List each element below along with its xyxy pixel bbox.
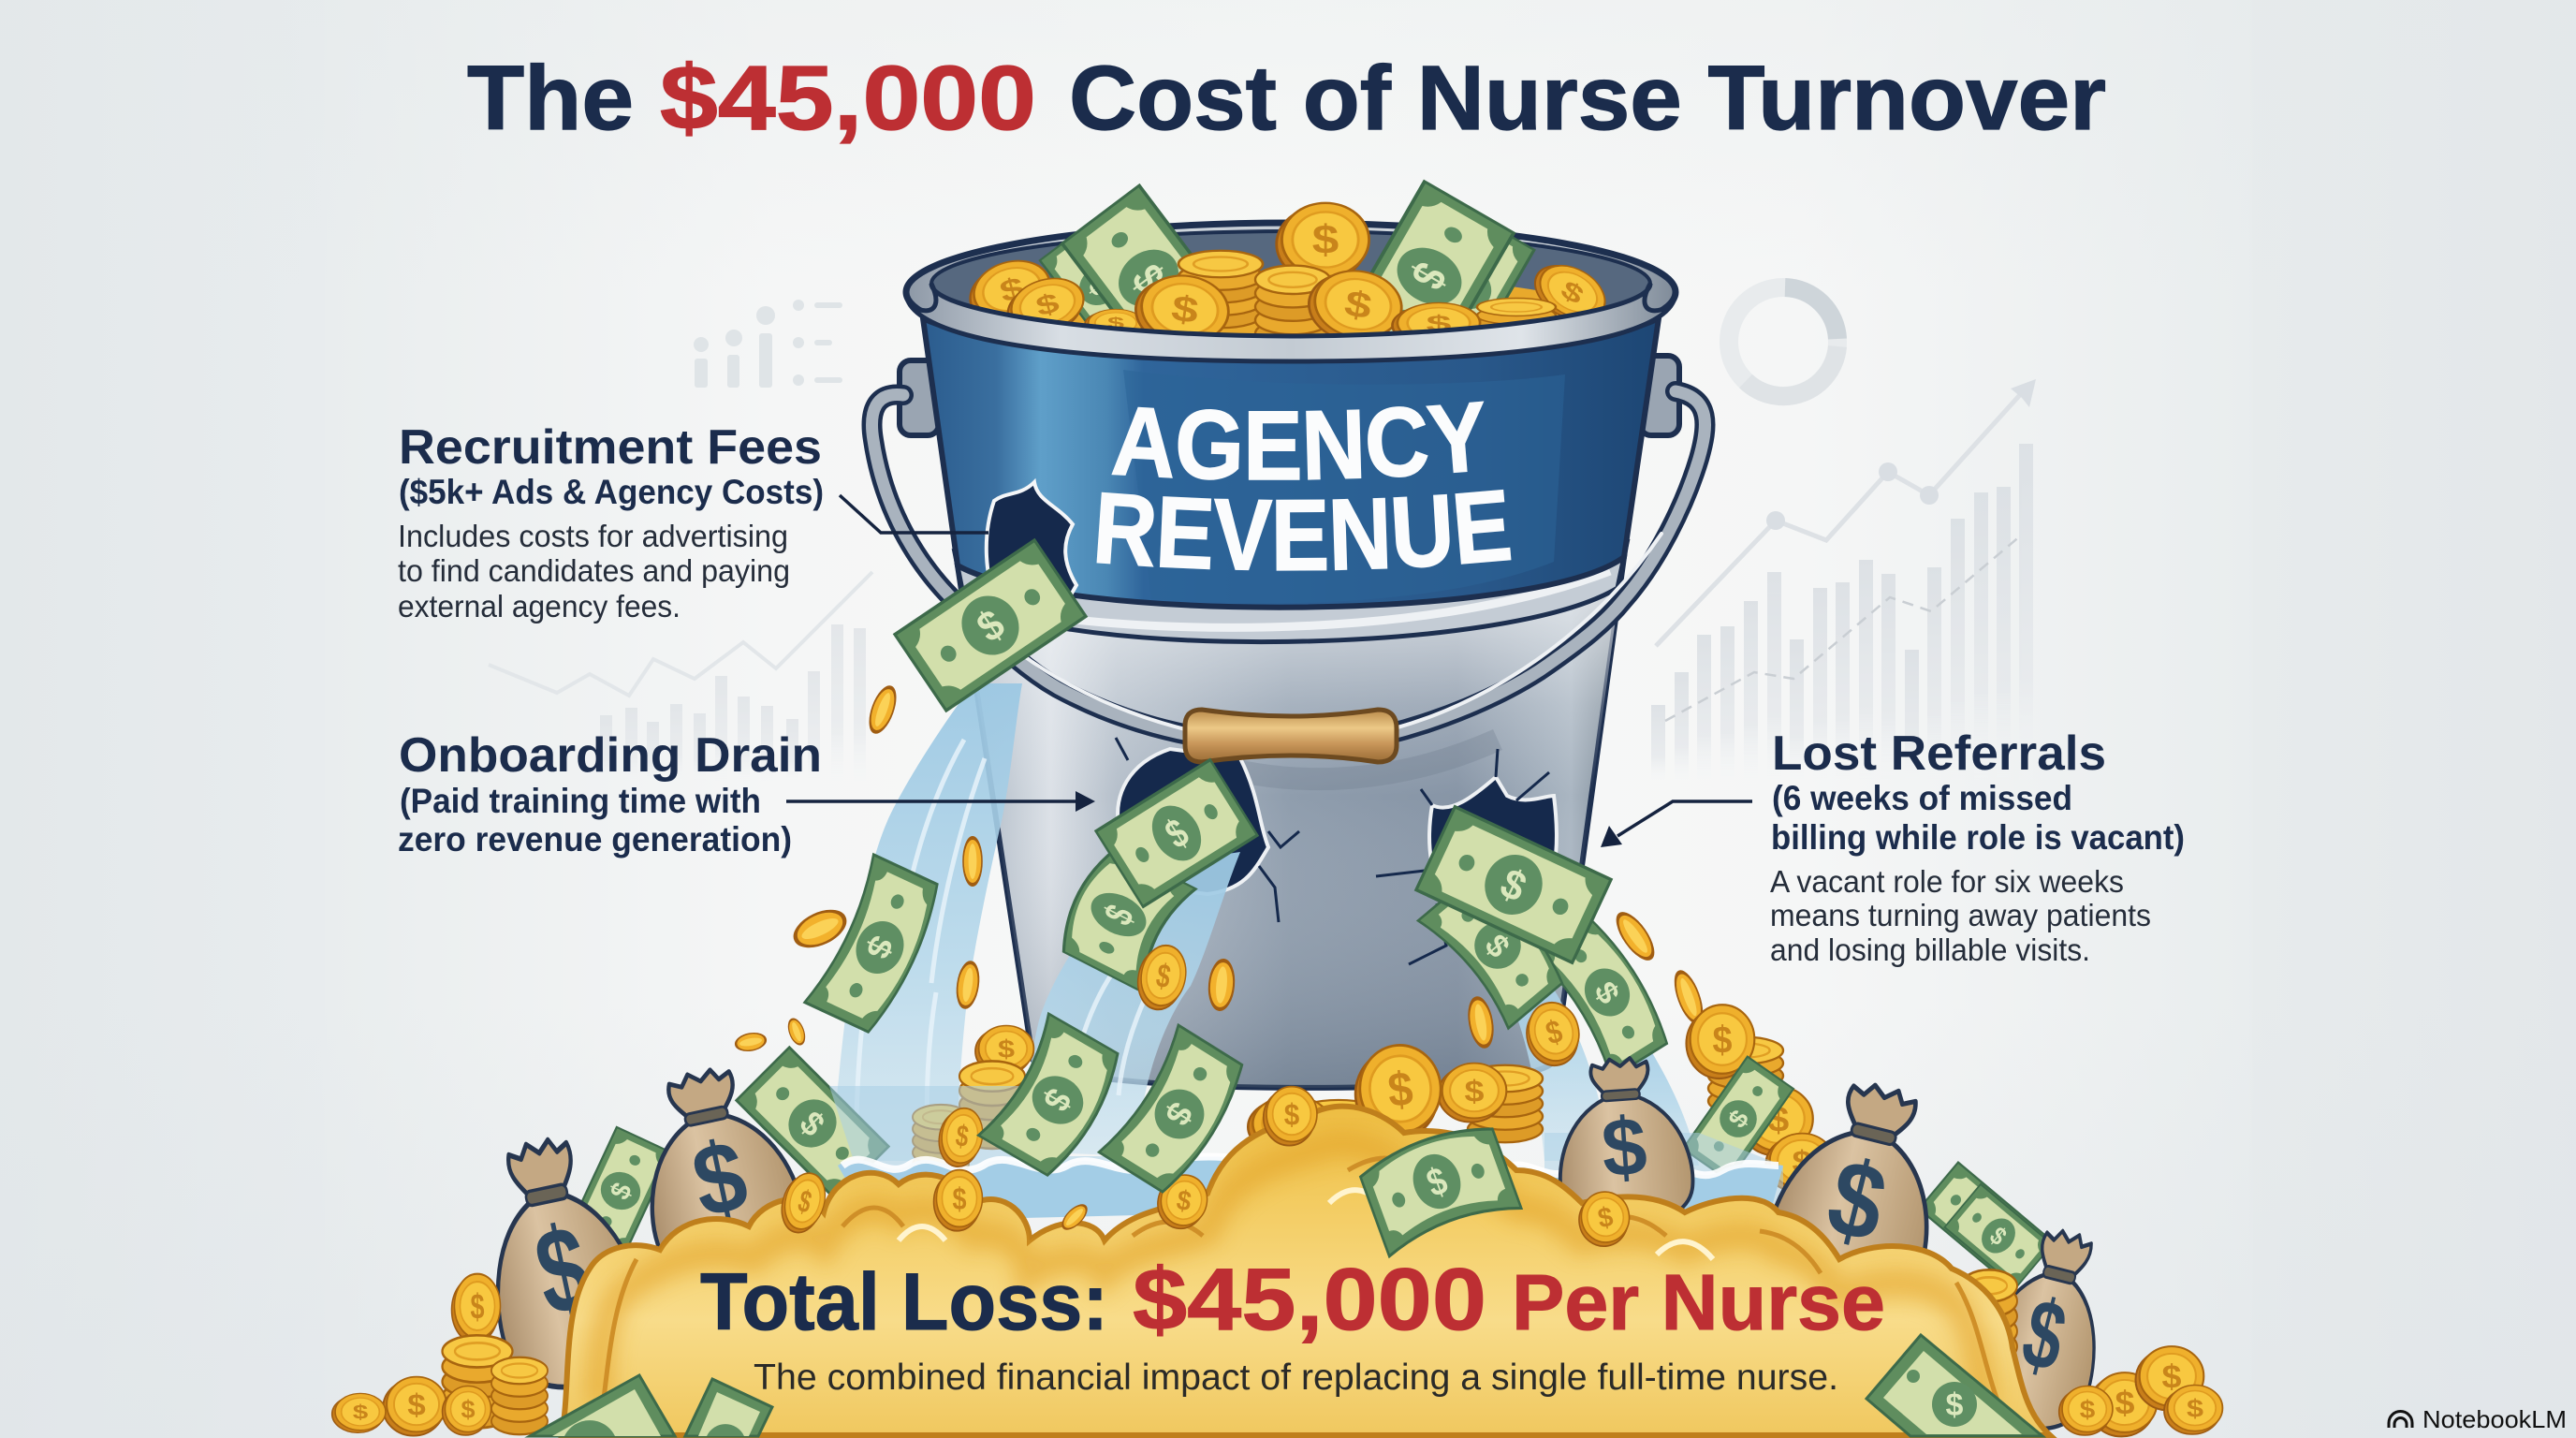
total loss headline: Total Loss: <box>700 1257 1108 1347</box>
bucket <box>862 180 1715 1125</box>
falling coins <box>735 684 1707 1071</box>
callout: recruitment fees: external agency fees. <box>398 589 681 624</box>
bottom corner coin piles <box>332 1269 2222 1436</box>
callout: recruitment fees: ($5k+ Ads & Agency Costs) <box>399 473 824 511</box>
callout: recruitment fees: Recruitment Fees <box>399 420 822 475</box>
callout: recruitment fees: to find candidates and paying <box>398 553 790 588</box>
total loss headline: $45,000 <box>1133 1250 1486 1348</box>
bottom bill: right, cropped by page edge: $ <box>1946 1387 1964 1423</box>
callout: recruitment fees <box>398 420 824 624</box>
bucket lower steel body <box>958 557 1624 1088</box>
arrow: onboarding drain <box>786 791 1095 812</box>
callout: lost referrals: (6 weeks of missed <box>1772 779 2072 817</box>
bucket label: Agency Revenue <box>1097 401 1511 571</box>
water stream: center <box>1025 852 1240 1156</box>
bottom bill: center left, cropped by page edge <box>685 1379 772 1436</box>
handle grip <box>1185 710 1397 762</box>
money bag: center right <box>1552 1054 1696 1231</box>
bucket label: Agency Revenue: REVENUE <box>1097 489 1511 571</box>
bail handle <box>872 391 1705 737</box>
water pool: right <box>1498 1133 1783 1222</box>
loose bills on mound <box>569 1048 2053 1287</box>
watermark: NotebookLM: NotebookLM <box>2422 1405 2567 1433</box>
decorative mini chart: top left <box>694 300 842 388</box>
bucket label: Agency Revenue: AGENCY <box>1111 401 1485 480</box>
bill on mound <box>1356 1117 1521 1256</box>
callout: onboarding drain: Onboarding Drain <box>399 728 822 783</box>
money bag: left <box>624 1057 813 1289</box>
callout: lost referrals: billing while role is vacant) <box>1771 818 2185 857</box>
callout: onboarding drain <box>398 728 822 858</box>
title: Cost of Nurse Turnover <box>1069 47 2106 149</box>
callout: onboarding drain: zero revenue generation) <box>398 820 792 858</box>
bucket contents: bills and coins <box>963 182 1615 371</box>
callout: onboarding drain: (Paid training time with <box>400 782 761 820</box>
decorative line and bar chart: left <box>489 572 872 781</box>
total loss headline <box>700 1250 1885 1348</box>
arrow: lost referrals <box>1601 801 1752 847</box>
money bags <box>465 1054 2124 1438</box>
bucket rim front <box>906 284 1676 361</box>
decorative line and bar chart: right <box>1651 379 2036 780</box>
total loss headline: Per Nurse <box>1512 1258 1885 1346</box>
money bag: far left <box>465 1127 657 1400</box>
callout: lost referrals <box>1770 726 2185 967</box>
bucket ears <box>900 356 1679 435</box>
bucket blue band <box>923 318 1659 608</box>
hole: lost referrals <box>1376 749 1557 964</box>
arrow: recruitment fees <box>840 495 988 533</box>
money bag: right <box>1756 1069 1961 1320</box>
title: $45,000 <box>660 47 1036 149</box>
money bag: far right <box>1968 1219 2124 1438</box>
falling bills <box>805 540 1676 1078</box>
bills at bucket base <box>978 1014 1251 1197</box>
callout: lost referrals: Lost Referrals <box>1772 726 2106 781</box>
water stream: right <box>1442 903 1699 1166</box>
total loss subtitle: The combined financial impact of replacing a single full-time nurse. <box>754 1357 1838 1398</box>
title: The <box>467 47 634 149</box>
hole: onboarding drain <box>1116 738 1299 922</box>
coin pile behind mound <box>913 1005 1834 1193</box>
coins on mound <box>776 1087 1633 1250</box>
callout: lost referrals: means turning away patients <box>1770 898 2151 932</box>
water stream: left <box>831 683 1022 1161</box>
hole: recruitment fees <box>987 482 1076 618</box>
callout: lost referrals: A vacant role for six weeks <box>1770 864 2124 899</box>
gold mound banner <box>530 1014 2050 1436</box>
bottom bill: right, cropped by page edge <box>1866 1335 2042 1436</box>
callout: recruitment fees: Includes costs for advertising <box>398 519 788 553</box>
title <box>467 47 2106 149</box>
decorative donut chart <box>1729 287 1837 396</box>
bucket rim back and interior <box>906 223 1676 361</box>
bottom bill: left, cropped by page edge <box>530 1375 675 1436</box>
bucket silver band <box>955 543 1627 642</box>
water pool: left <box>829 1086 1278 1222</box>
callout: lost referrals: and losing billable visits. <box>1770 932 2090 967</box>
